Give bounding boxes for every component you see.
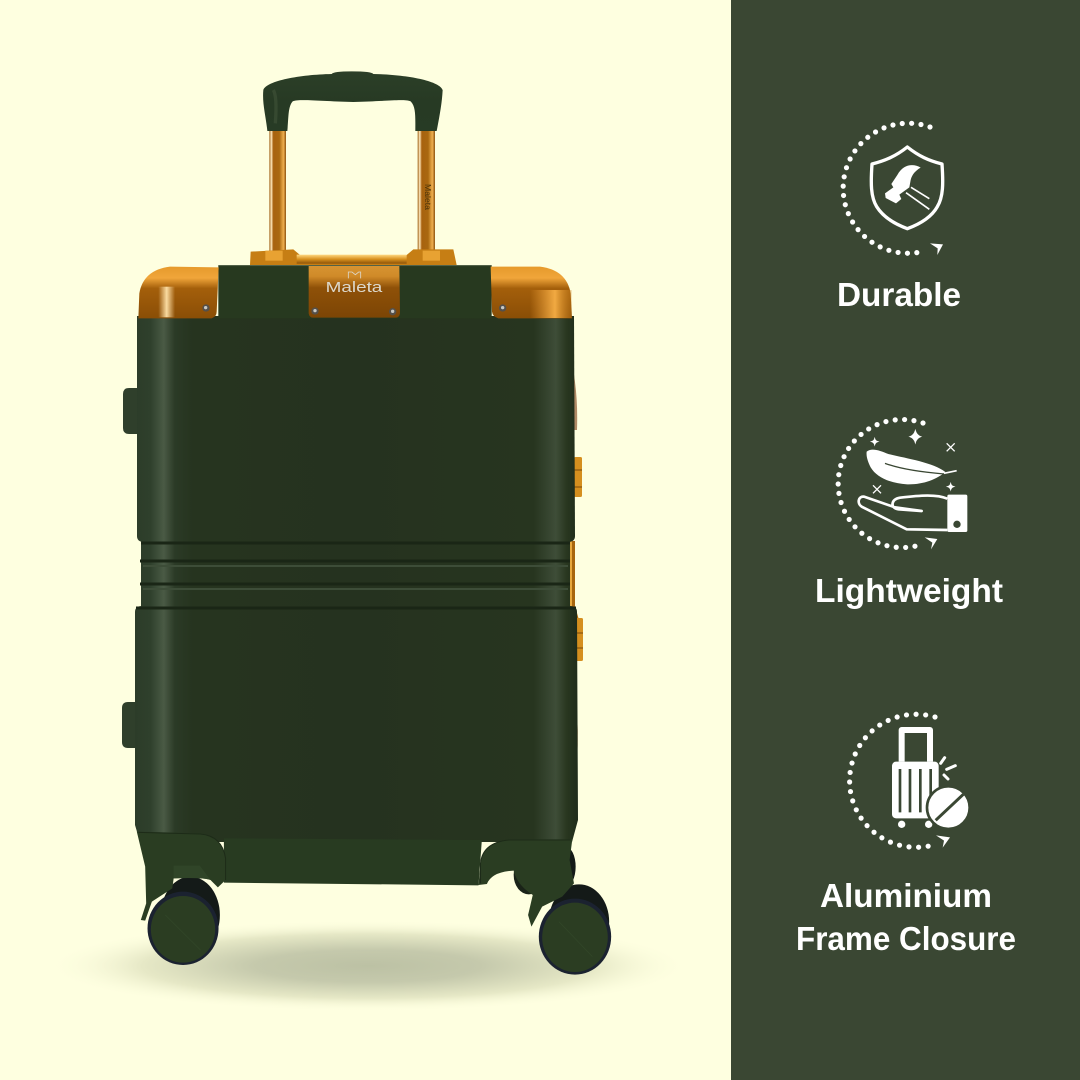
left side carry handles — [122, 388, 139, 748]
panel: features sidebar — [731, 0, 1080, 1080]
label: Aluminium Frame Closure: Aluminium — [820, 877, 992, 914]
background — [0, 0, 731, 1080]
feature: aluminium frame closure — [796, 714, 1016, 957]
ribs — [141, 541, 570, 609]
logo plate — [309, 266, 400, 318]
label: Aluminium Frame Closure — [796, 877, 1016, 957]
bottom base and wheel housings — [137, 832, 574, 927]
wheels — [148, 847, 611, 975]
gold corner: right — [491, 267, 572, 318]
label: Aluminium Frame Closure: Frame Closure — [796, 920, 1016, 957]
main shell — [135, 316, 578, 927]
icon: feather on hand — [838, 420, 967, 549]
upper shell — [137, 316, 575, 542]
feature: durable — [837, 123, 961, 313]
right side gold hinges and latch — [567, 375, 583, 760]
telescopic handle — [250, 71, 457, 265]
logo plate: Maleta — [326, 280, 383, 296]
icon: suitcase with no-zip badge — [850, 714, 970, 848]
icon: shield with hammer — [843, 123, 943, 255]
label: Lightweight: Lightweight — [815, 572, 1003, 609]
suitcase product image — [122, 71, 611, 975]
ground shadow — [46, 920, 690, 1012]
telescopic handle: Maleta — [423, 184, 433, 210]
lower shell — [135, 606, 578, 842]
top trim with gold corners and logo plate — [138, 266, 572, 318]
feature: lightweight — [815, 420, 1003, 609]
label: Durable: Durable — [837, 276, 961, 313]
gold corner: left — [138, 267, 219, 318]
